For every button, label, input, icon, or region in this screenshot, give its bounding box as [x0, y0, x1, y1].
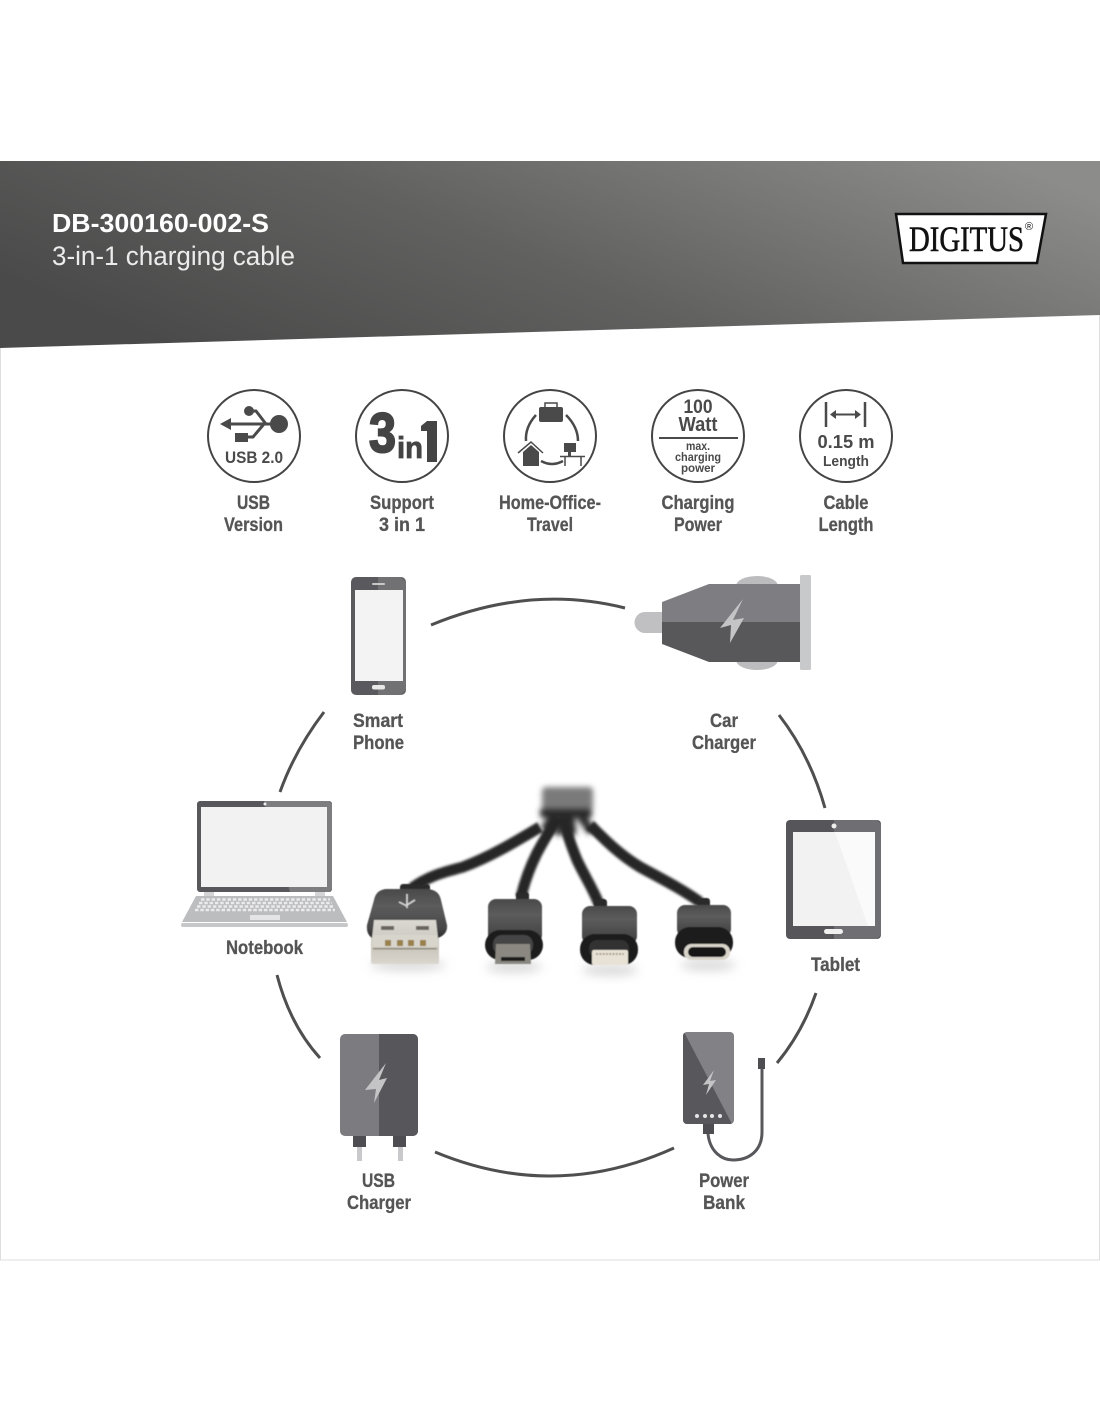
icon: smart phone — [351, 577, 406, 695]
label: Charging Power — [662, 493, 734, 536]
label: Smart Phone — [353, 711, 404, 754]
cables — [412, 817, 700, 904]
label: Notebook: Notebook — [226, 938, 303, 959]
icon: charging power 100 Watt: max. — [686, 441, 710, 453]
icon: cable length: Length — [823, 453, 869, 470]
label: Home-Office-Travel: Home-Office- — [499, 493, 601, 514]
subtitle: 3-in-1 charging cable — [52, 241, 295, 271]
label: Car Charger: Charger — [692, 733, 757, 754]
ring of arcs — [277, 599, 825, 1176]
icon: USB version — [208, 390, 300, 482]
label: Charging Power: Charging — [662, 493, 734, 514]
label: Support 3 in 1 — [370, 493, 435, 536]
connector: micro USB — [485, 892, 543, 964]
label: Support 3 in 1: 3 in 1 — [379, 515, 425, 536]
label: Power Bank — [699, 1171, 750, 1214]
label: Power Bank: Power — [699, 1171, 750, 1192]
icon: notebook — [181, 801, 348, 927]
icon: cable length: 0.15 m — [818, 432, 874, 452]
icon: charging power 100 Watt: 100 — [684, 397, 712, 418]
label: Car Charger: Car — [710, 711, 739, 732]
logo: Digitus: DIGITUS — [909, 219, 1024, 259]
label: USB Version — [224, 493, 283, 536]
label: USB Version: Version — [224, 515, 283, 536]
label: USB Version: USB — [237, 493, 270, 514]
icon: charging power 100 Watt — [652, 390, 744, 482]
label: Support 3 in 1: Support — [370, 493, 435, 514]
icon: USB charger — [340, 1034, 418, 1161]
icon: tablet — [786, 820, 881, 939]
icon: home office travel — [504, 390, 596, 482]
connector shadows — [370, 959, 736, 976]
label: USB Charger: USB — [362, 1171, 395, 1192]
label: Home-Office-Travel: Travel — [527, 515, 573, 536]
label: USB Charger — [347, 1171, 412, 1214]
header banner — [0, 161, 1100, 348]
blurred common plug — [540, 787, 593, 835]
label: Tablet: Tablet — [811, 955, 861, 976]
label: Car Charger — [692, 711, 757, 754]
icon: charging power 100 Watt: Watt — [678, 414, 718, 436]
page panel — [0, 162, 1100, 1260]
icon: charging power 100 Watt: power — [681, 463, 716, 475]
icon: USB version: USB 2.0 — [225, 448, 283, 467]
label: Charging Power: Power — [674, 515, 722, 536]
connector: USB-C — [675, 898, 733, 960]
connector: Lightning — [580, 899, 638, 965]
icon: 3 in 1: in — [397, 430, 423, 465]
label: Home-Office-Travel — [499, 493, 601, 536]
icon: power bank — [683, 1032, 765, 1160]
label: Power Bank: Bank — [703, 1193, 745, 1214]
label: Smart Phone: Phone — [353, 733, 404, 754]
label: Cable Length: Cable — [824, 493, 868, 514]
connector: USB-A — [367, 884, 733, 965]
logo: Digitus: ® — [1025, 221, 1033, 233]
icon: car charger — [634, 575, 811, 670]
product photo: 3-in-1 cable — [367, 787, 736, 976]
label: Cable Length — [818, 493, 874, 536]
label: Smart Phone: Smart — [353, 711, 404, 732]
product code title: DB-300160-002-S — [52, 208, 269, 238]
infographic — [0, 161, 1100, 1260]
label: USB Charger: Charger — [347, 1193, 412, 1214]
label: Cable Length: Length — [818, 515, 874, 536]
icon: charging power 100 Watt: charging — [675, 452, 721, 464]
icon: 3 in 1 — [356, 390, 448, 482]
icon: cable length — [800, 390, 892, 482]
icon: 3 in 1: 3 — [369, 401, 396, 464]
